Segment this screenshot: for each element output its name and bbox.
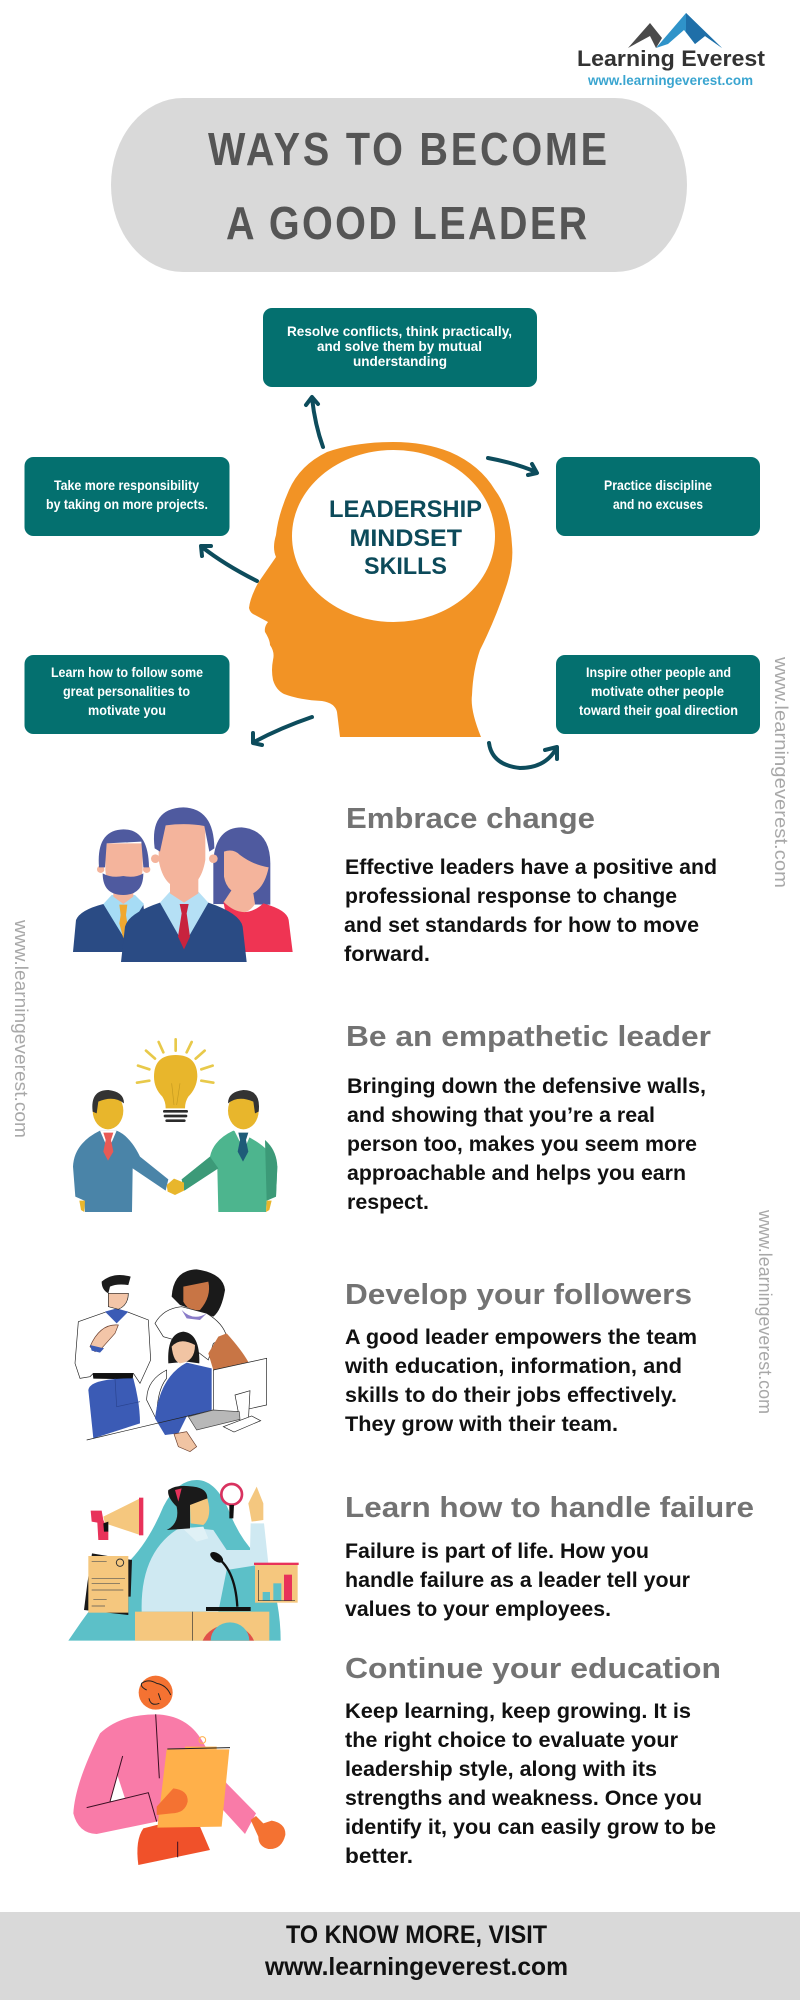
callout: inspire other people: Inspire other people and (586, 664, 731, 680)
section: develop your followers: A good leader empowers the team (345, 1325, 697, 1349)
section: continue your education: Continue your education (345, 1653, 721, 1685)
section: develop your followers: They grow with their team. (345, 1412, 618, 1436)
section: learn how to handle failure: Failure is part of life. How you (345, 1539, 649, 1563)
section: be an empathetic leader: approachable and helps you earn (347, 1161, 686, 1185)
watermark: right lower: www.learningeverest.com (755, 1209, 775, 1414)
callout: inspire other people: motivate other people (591, 683, 724, 699)
section: be an empathetic leader: and showing that you’re a real (347, 1103, 655, 1127)
logo: Learning Everest: www.learningeverest.com (587, 72, 753, 88)
section: be an empathetic leader: Bringing down the defensive walls, (347, 1074, 706, 1098)
section: be an empathetic leader: person too, makes you seem more (347, 1132, 697, 1156)
section: develop your followers (344, 1279, 697, 1436)
section: develop your followers: with education, information, and (344, 1354, 682, 1378)
callout: follow great personalities: great personalities to (63, 683, 190, 699)
section: learn how to handle failure: handle failure as a leader tell your (345, 1568, 691, 1592)
watermark: right top: www.learningeverest.com (771, 656, 791, 888)
callout: follow great personalities (24, 655, 230, 734)
callout: take more responsibility (24, 457, 230, 536)
title banner: WAYS TO BECOME (208, 124, 607, 176)
section: embrace change: and set standards for how to move (344, 913, 699, 937)
section: learn how to handle failure: values to your employees. (345, 1597, 611, 1621)
arrow: curved to lower right box (489, 743, 557, 768)
section: continue your education: identify it, you can easily grow to be (345, 1815, 716, 1839)
icon: presenter at podium (68, 1480, 299, 1641)
head diagram: leadership mindset skills: LEADERSHIP (329, 496, 482, 523)
logo: Learning Everest: Learning Everest (577, 46, 766, 71)
callout: resolve conflicts: understanding (353, 353, 447, 369)
section: continue your education: strengths and weakness. Once you (345, 1786, 702, 1810)
callout: resolve conflicts (263, 308, 537, 387)
arrow: to top box (306, 397, 323, 447)
head diagram: leadership mindset skills (249, 442, 512, 737)
section: embrace change (344, 803, 717, 966)
head diagram: leadership mindset skills: SKILLS (364, 553, 447, 580)
logo: Learning Everest (577, 13, 766, 88)
section: continue your education: better. (345, 1844, 413, 1868)
callout: practice discipline (556, 457, 760, 536)
section: continue your education (345, 1653, 721, 1868)
callout: inspire other people (556, 655, 760, 734)
callout: inspire other people: toward their goal direction (579, 702, 738, 718)
section: continue your education: Keep learning, keep growing. It is (345, 1699, 691, 1723)
section: embrace change: Embrace change (346, 803, 595, 835)
arrow: to upper left box (201, 546, 257, 581)
section: embrace change: professional response to change (345, 884, 677, 908)
title banner: A GOOD LEADER (226, 198, 587, 250)
callout: take more responsibility: Take more responsibility (54, 477, 199, 493)
section: be an empathetic leader (346, 1021, 711, 1214)
callout: resolve conflicts: and solve them by mutual (317, 338, 482, 354)
section: develop your followers: skills to do their jobs effectively. (345, 1383, 677, 1407)
footer band (0, 1912, 800, 2000)
section: embrace change: Effective leaders have a positive and (345, 855, 717, 879)
title banner (111, 98, 687, 272)
callout: follow great personalities: Learn how to follow some (51, 664, 203, 680)
arrow: to lower left box (253, 717, 312, 745)
callout: resolve conflicts: Resolve conflicts, think practically, (287, 323, 512, 339)
callout: take more responsibility: by taking on more projects. (46, 496, 208, 512)
callout: practice discipline: and no excuses (613, 496, 703, 512)
section: continue your education: the right choice to evaluate your (345, 1728, 679, 1752)
callout: practice discipline: Practice discipline (604, 477, 712, 493)
arrow: to right box (488, 458, 537, 475)
section: learn how to handle failure (345, 1492, 754, 1621)
section: embrace change: forward. (344, 942, 430, 966)
section: continue your education: leadership style, along with its (345, 1757, 657, 1781)
footer band: TO KNOW MORE, VISIT (286, 1921, 547, 1949)
section: learn how to handle failure: Learn how to handle failure (345, 1492, 754, 1524)
callout: follow great personalities: motivate you (88, 702, 166, 718)
icon: team of three people (73, 807, 293, 962)
icon: team at computer (75, 1269, 267, 1452)
footer band: www.learningeverest.com (264, 1953, 568, 1981)
icon: person with clipboard (73, 1676, 285, 1865)
head diagram: leadership mindset skills: MINDSET (350, 525, 462, 552)
section: develop your followers: Develop your followers (345, 1279, 692, 1311)
watermark: left: www.learningeverest.com (11, 919, 31, 1138)
section: be an empathetic leader: respect. (347, 1190, 429, 1214)
section: be an empathetic leader: Be an empathetic leader (346, 1021, 711, 1053)
icon: handshake under light bulb (73, 1039, 277, 1212)
